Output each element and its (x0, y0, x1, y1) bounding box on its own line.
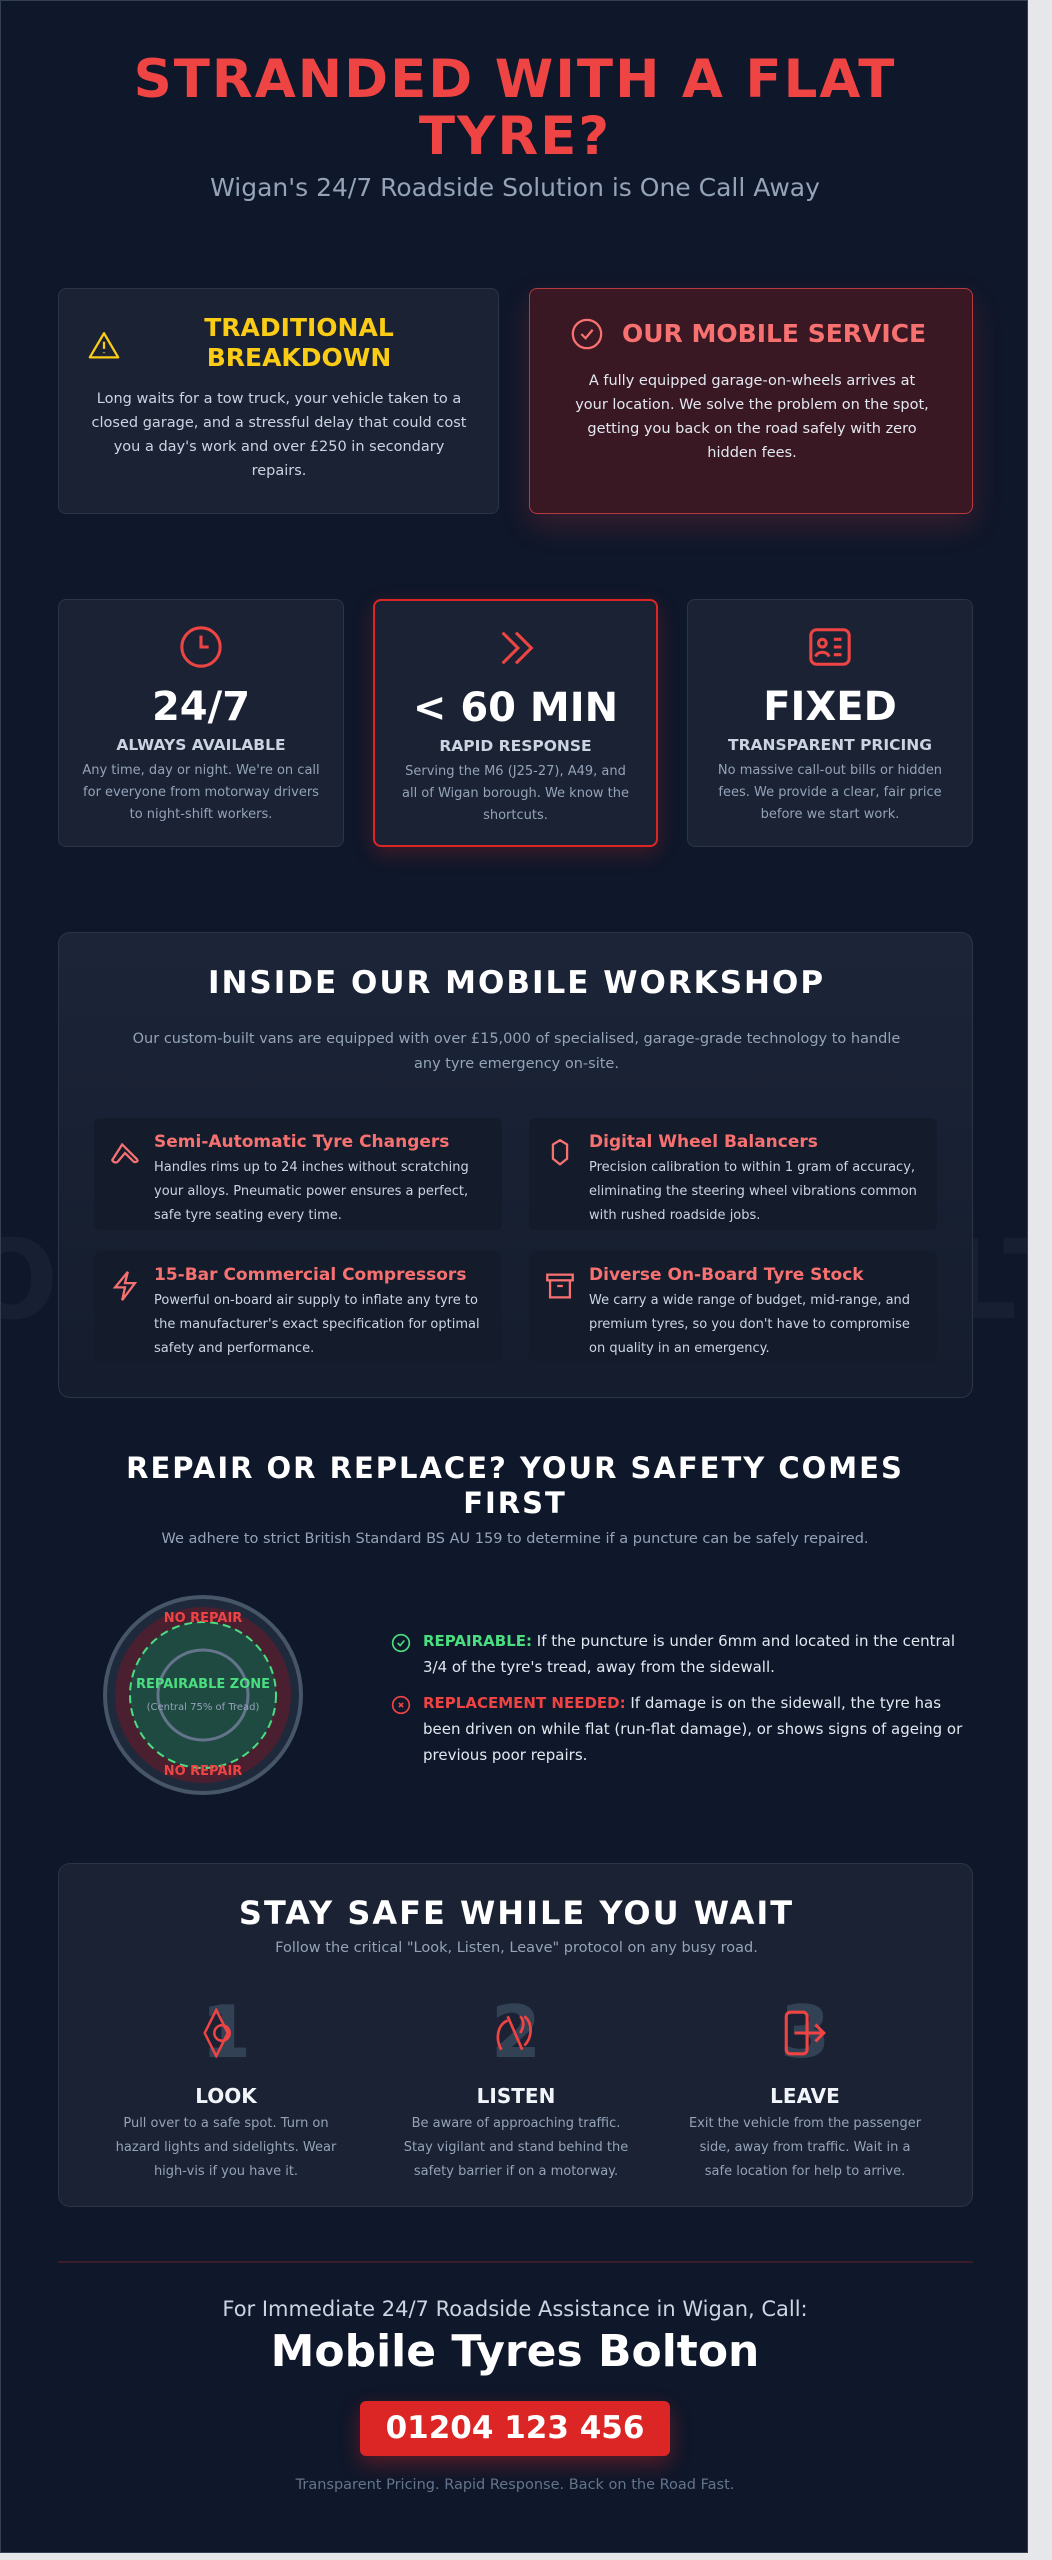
callout text: For Immediate 24/7 Roadside Assistance in Wigan, Call: (222, 2297, 808, 2321)
feature: compressors (94, 1251, 502, 1363)
chart: tyre diagram: (Central 75% of Tread) (147, 1702, 259, 1713)
button: phone: 01204 123 456 (386, 2410, 644, 2446)
chart: tyre diagram (103, 1595, 303, 1795)
panel: mobile service (529, 288, 973, 514)
title (134, 49, 896, 167)
list: replacement: REPLACEMENT NEEDED: If damage is on the sidewall, the tyre has been driven on while flat (run-flat damage), or shows signs of ageing or previous poor repairs. (423, 1694, 962, 1764)
feature: balancers (529, 1118, 937, 1230)
step: leave (689, 1990, 922, 2179)
icon: wrench (111, 1142, 139, 1164)
stat: 24/7 (58, 599, 344, 847)
step: look: LOOK (195, 2084, 257, 2108)
feature: compressors: Powerful on-board air supply to inflate any tyre to the manufacturer's exact specification for optimal safety and performance. (154, 1293, 480, 1356)
icon: eye (203, 2008, 231, 2058)
brand name: Mobile Tyres Bolton (271, 2326, 759, 2377)
text: A fully equipped garage-on-wheels arrives at your location. We solve the problem on the spot, getting you back on the road safely with zero hidden fees. (575, 373, 929, 461)
heading: TRADITIONAL (204, 313, 394, 342)
subtitle: repair: We adhere to strict British Standard BS AU 159 to determine if a puncture can be safely repaired. (161, 1531, 869, 1547)
icon: check (392, 1634, 410, 1652)
stat: 24/7: ALWAYS AVAILABLE (116, 736, 286, 754)
stat: 60 min: RAPID RESPONSE (439, 737, 592, 755)
footer tagline: Transparent Pricing. Rapid Response. Back on the Road Fast. (296, 2477, 734, 2493)
step: leave: LEAVE (770, 2084, 840, 2108)
heading (204, 313, 394, 372)
step: listen (404, 1990, 628, 2179)
step: listen: LISTEN (477, 2084, 555, 2108)
icon: check (572, 318, 602, 350)
panel: traditional breakdown (58, 288, 499, 514)
stat: 60 min: < 60 MIN (413, 685, 618, 731)
icon: box (546, 1274, 574, 1298)
title: STRANDED WITH A FLAT (134, 49, 896, 110)
stat: 60 min: Serving the M6 (J25-27), A49, and all of Wigan borough. We know the shortcuts. (402, 764, 629, 823)
feature: tyre stock (529, 1251, 937, 1363)
heading: STAY SAFE WHILE YOU WAIT (239, 1894, 794, 1932)
step: look (116, 1990, 336, 2179)
stat: fixed: FIXED (763, 684, 897, 730)
step: leave: Exit the vehicle from the passenger side, away from traffic. Wait in a safe location for help to arrive. (689, 2116, 921, 2179)
chart: tyre diagram: NO REPAIR (164, 1764, 242, 1779)
stat: 24/7: Any time, day or night. We're on call for everyone from motorway drivers to night-shift workers. (82, 763, 320, 822)
title: TYRE? (419, 106, 611, 167)
feature: tyre changers: Semi-Automatic Tyre Changers (154, 1132, 449, 1152)
icon: ear (496, 2015, 532, 2050)
icon: warning (88, 332, 120, 358)
heading: repair or replace: REPAIR OR REPLACE? YOUR SAFETY COMES FIRST (126, 1451, 904, 1520)
feature: tyre stock: We carry a wide range of budget, mid-range, and premium tyres, so you don't have to compromise on quality in an emergency. (589, 1293, 910, 1356)
icon: clock (180, 626, 222, 668)
stat: fixed (687, 599, 973, 847)
icon: exit (784, 2010, 826, 2056)
stat: fixed: No massive call-out bills or hidden fees. We provide a clear, fair price before we start work. (718, 763, 942, 822)
heading: BREAKDOWN (207, 343, 391, 372)
button: phone (360, 2401, 670, 2456)
chart: tyre diagram: NO REPAIR (164, 1611, 242, 1626)
feature: tyre stock: Diverse On-Board Tyre Stock (589, 1265, 864, 1285)
chart: tyre diagram: REPAIRABLE ZONE (136, 1677, 270, 1692)
stat: 60 min (373, 599, 658, 847)
feature: balancers: Digital Wheel Balancers (589, 1132, 818, 1152)
subtitle: Follow the critical "Look, Listen, Leave" protocol on any busy road. (275, 1940, 758, 1956)
icon: cross (392, 1696, 410, 1714)
step: listen: Be aware of approaching traffic. Stay vigilant and stand behind the safety barrier if on a motorway. (404, 2116, 628, 2179)
icon: chevrons (502, 632, 534, 664)
text: Long waits for a tow truck, your vehicle taken to a closed garage, and a stressful delay that could cost you a day's work and over £250 in secondary repairs. (92, 391, 466, 479)
icon: hexagon (552, 1138, 568, 1166)
icon: bolt (112, 1271, 138, 1301)
panel: stay safe (58, 1863, 973, 2207)
panel: workshop (58, 932, 973, 1398)
list: repairable: REPAIRABLE: If the puncture is under 6mm and located in the central 3/4 of the tyre's tread, away from the sidewall. (423, 1632, 955, 1676)
stat: 24/7: 24/7 (152, 684, 250, 730)
step: listen: 2 (491, 1990, 541, 2074)
intro text: Our custom-built vans are equipped with over £15,000 of specialised, garage-grade technology to handle any tyre emergency on-site. (133, 1031, 900, 1072)
feature: compressors: 15-Bar Commercial Compressors (154, 1265, 466, 1285)
stat: fixed: TRANSPARENT PRICING (728, 736, 932, 754)
feature: tyre changers: Handles rims up to 24 inches without scratching your alloys. Pneumatic power ensures a perfect, safe tyre seating every time. (154, 1160, 469, 1223)
step: look: Pull over to a safe spot. Turn on hazard lights and sidelights. Wear high-vis if you have it. (116, 2116, 336, 2179)
heading: INSIDE OUR MOBILE WORKSHOP (208, 965, 825, 1001)
feature: tyre changers (94, 1118, 502, 1230)
step: leave: 3 (780, 1990, 830, 2074)
heading: OUR MOBILE SERVICE (622, 319, 926, 348)
step: look: 1 (201, 1990, 251, 2074)
feature: balancers: Precision calibration to within 1 gram of accuracy, eliminating the steering wheel vibrations common with rushed roadside jobs. (589, 1160, 917, 1223)
icon: id card (809, 628, 851, 666)
subtitle: Wigan's 24/7 Roadside Solution is One Call Away (210, 173, 820, 202)
